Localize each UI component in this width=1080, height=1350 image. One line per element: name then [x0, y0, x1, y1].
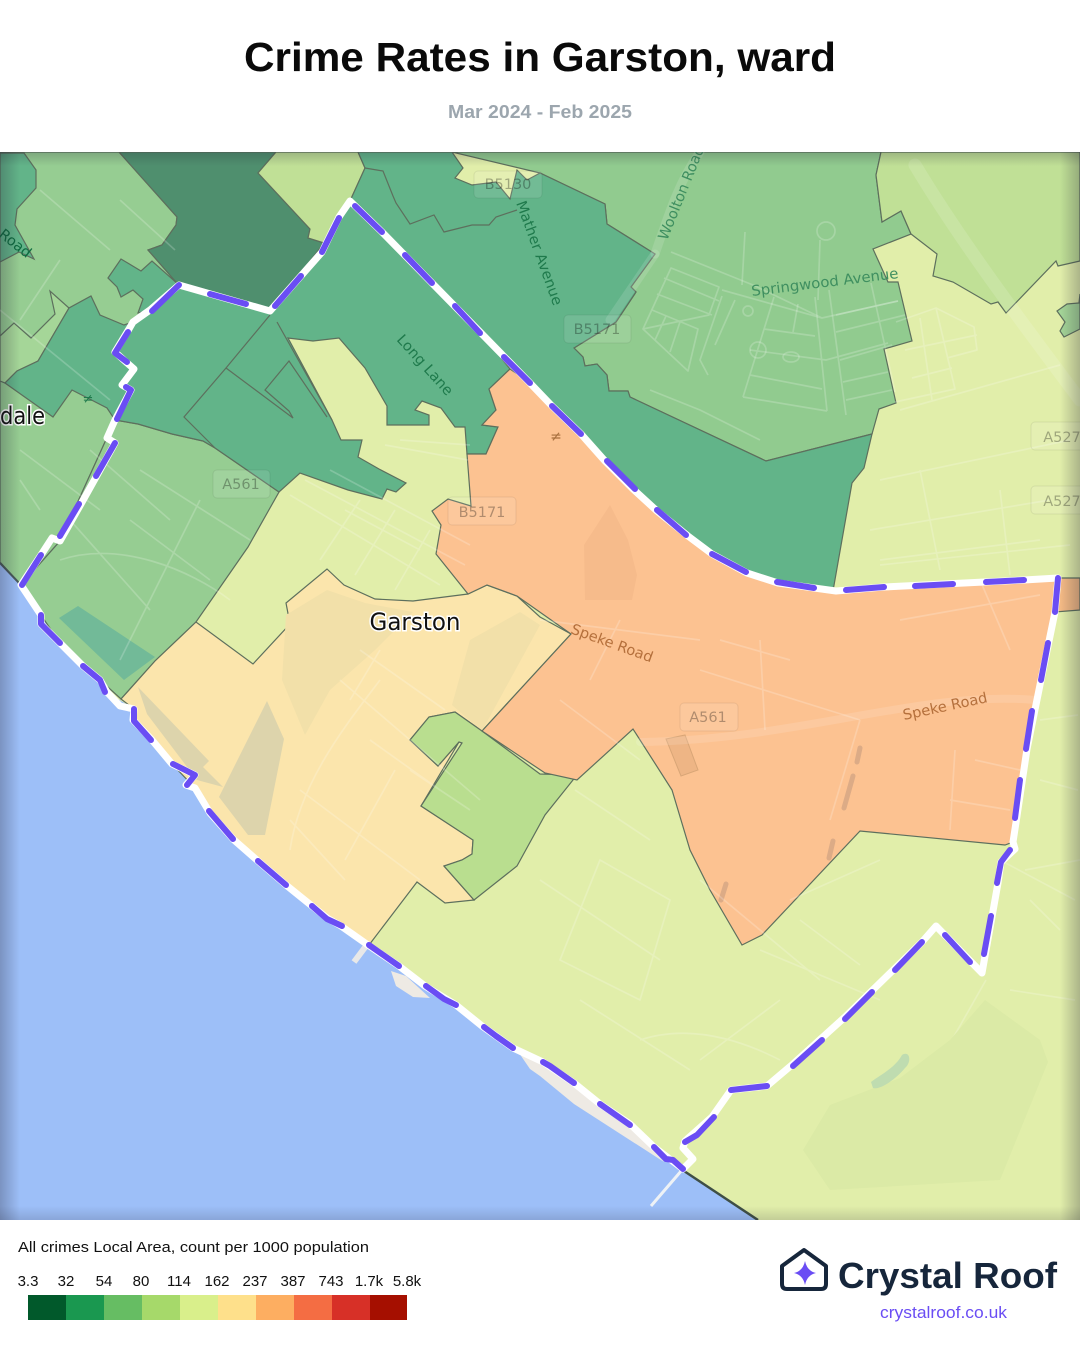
region: south-west green [21, 420, 279, 699]
orange road names: Speke Road [902, 690, 989, 724]
road numbers: A527 [1043, 430, 1080, 446]
region: Garston shaded area [282, 590, 540, 735]
region: small north-west green [108, 259, 179, 313]
region: darkest north area [119, 152, 324, 313]
road numbers: B5171 [459, 505, 505, 521]
region: far north-west green [0, 153, 36, 262]
legend values: 743 [318, 1273, 344, 1290]
orange road names [569, 622, 989, 724]
green road names [0, 144, 899, 399]
wide light roads [610, 152, 1080, 742]
orange area features [666, 734, 862, 902]
website url: crystalroof.co.uk [880, 1304, 1008, 1322]
subtitle: date range: Mar 2024 - Feb 2025 [448, 101, 632, 122]
road network [0, 190, 1080, 1165]
place label: dale: dale [0, 402, 45, 430]
green road names: Woolton Road [656, 144, 708, 242]
region: green area north of railway [350, 152, 872, 591]
icon: house with star [782, 1250, 826, 1289]
green road names: Mather Avenue [512, 199, 565, 308]
road shields [213, 171, 1080, 731]
region: west green pocket [5, 296, 134, 420]
legend [18, 1239, 422, 1320]
green road names: Springwood Avenue [751, 266, 899, 300]
legend values: 80 [133, 1273, 149, 1290]
icon: railway station: ≠ [550, 429, 562, 445]
icon: railway station west: ≠ [83, 392, 93, 407]
legend values: 387 [280, 1273, 306, 1290]
region: inner ward divisions [184, 168, 517, 448]
legend values: 1.7k [355, 1273, 384, 1290]
logo wordmark: Crystal Roof [838, 1255, 1058, 1296]
legend values: 162 [204, 1273, 230, 1290]
region: far east small green patch [1057, 294, 1080, 337]
legend values [18, 1273, 422, 1290]
park in south-east [884, 1031, 971, 1166]
road numbers: A561 [689, 710, 727, 726]
region: Springwood green [452, 152, 912, 461]
region: north-east pale green [876, 152, 1080, 313]
legend values: 54 [96, 1273, 112, 1290]
place label: Garston: Garston [370, 608, 460, 636]
legend values: 114 [167, 1273, 191, 1290]
orange road names: Speke Road [569, 622, 655, 666]
region: light green estate [410, 712, 577, 900]
region: teal park patch [59, 606, 155, 680]
region: orange strip east [1058, 577, 1080, 612]
region: pale green north tip [258, 152, 365, 243]
ward boundary: white casing [21, 201, 1058, 1169]
road numbers: A527 [1043, 494, 1080, 510]
region: Garston cream [121, 569, 571, 945]
road numbers [222, 177, 1080, 726]
map edge shading [0, 152, 1080, 1220]
legend values: 32 [58, 1273, 74, 1290]
legend title: All crimes Local Area, count per 1000 population [18, 1239, 369, 1256]
region: orange high crime area [432, 369, 1058, 945]
pond [871, 1054, 909, 1088]
road numbers: B5171 [574, 322, 620, 338]
title: Crime Rates in Garston, ward [244, 34, 836, 80]
map labels [0, 144, 1080, 731]
ward boundary: purple dashes [22, 206, 1058, 1169]
legend values: 3.3 [18, 1273, 38, 1290]
green road names: Long Lane [393, 332, 456, 399]
road numbers: A561 [222, 477, 260, 493]
region: west mid green [0, 152, 179, 585]
legend values: 5.8k [393, 1273, 422, 1290]
logo: Crystal Roof [782, 1250, 1058, 1322]
beach and piers [0, 563, 758, 1220]
region: green ward within Garston [115, 201, 510, 499]
panel: choropleth map [0, 144, 1080, 1220]
road numbers: B5130 [485, 177, 531, 193]
region: water [0, 562, 758, 1220]
legend values: 237 [242, 1273, 268, 1290]
region: west lighter pocket [0, 291, 69, 383]
region: docks [138, 687, 284, 835]
legend colour scale [28, 1295, 407, 1320]
